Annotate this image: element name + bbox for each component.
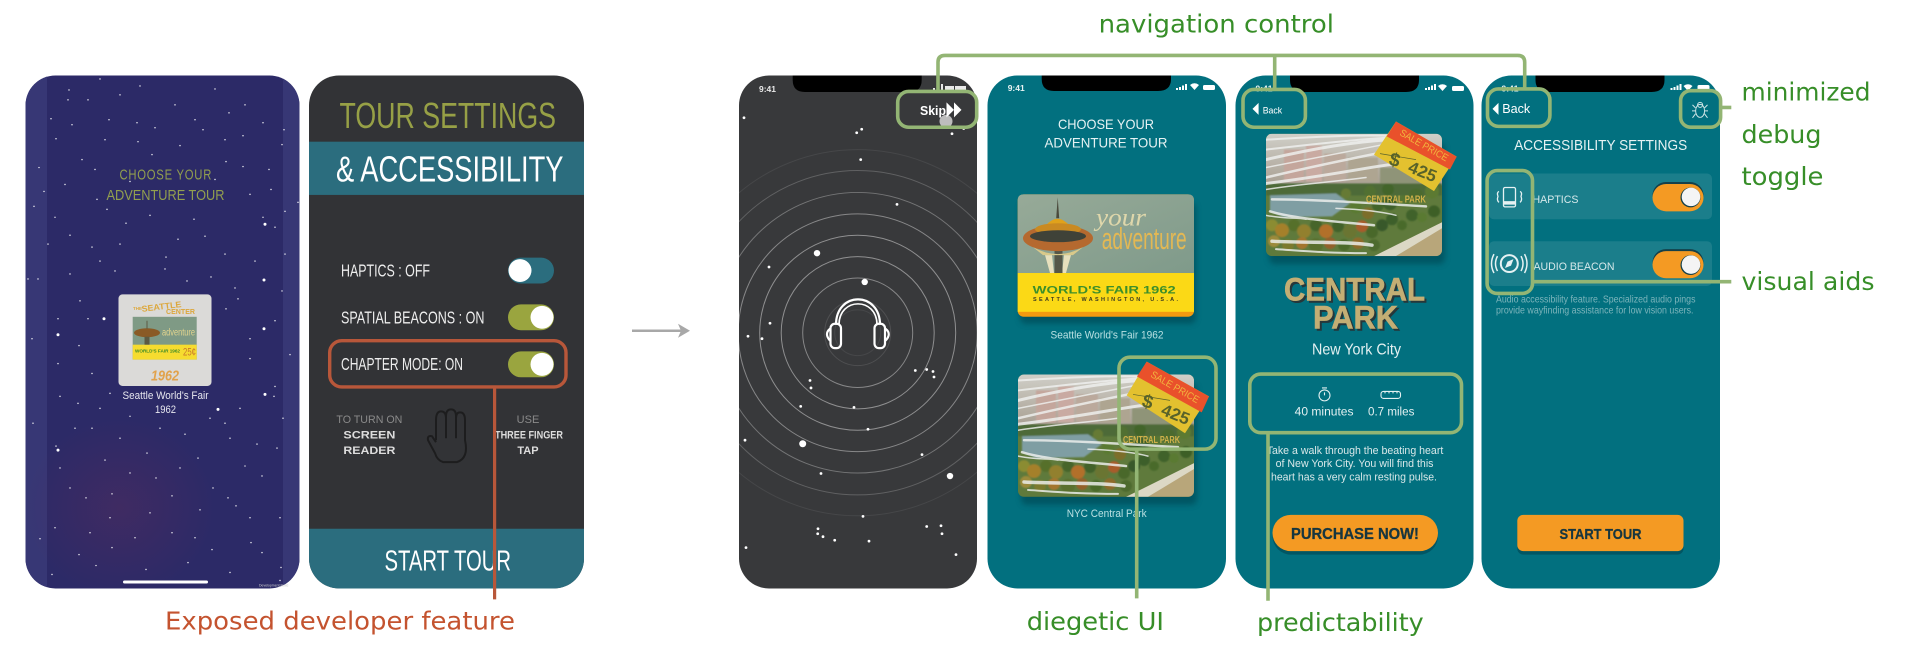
notch [1042, 76, 1171, 91]
slide card: Seattle Center 1962: 25¢ [183, 347, 196, 359]
slide card: Seattle Center 1962: THE [133, 306, 142, 311]
icon: phone haptics [1497, 187, 1522, 207]
setting: haptics off [341, 258, 554, 283]
card: NYC Central Park [1018, 362, 1209, 505]
caption: Seattle World's Fair 1962 [122, 390, 209, 416]
title: accessibility: & ACCESSIBILITY [336, 149, 564, 189]
sale tag [1127, 362, 1209, 433]
status bar [1008, 83, 1215, 93]
icon: debug bug [1692, 102, 1708, 118]
space needle illustration [1023, 197, 1093, 273]
row: haptics [1489, 174, 1712, 219]
home indicator [123, 580, 208, 583]
screen reader hint: USE [517, 414, 539, 426]
title: tour settings: TOUR SETTINGS [339, 95, 556, 136]
arrow: redesign transition [632, 324, 690, 338]
callout: exposed developer feature: Exposed developer feature [165, 607, 515, 636]
card: World's Fair 1962: WORLD'S FAIR 1962 [1033, 284, 1176, 296]
card: Central Park with sale tag: CENTRAL PARK [1366, 194, 1427, 205]
card: World's Fair 1962: adventure [1102, 221, 1187, 256]
notch [793, 76, 922, 92]
annotation: visual aids: visual aids [1741, 267, 1874, 296]
sale tag: SALE PRICE [1148, 370, 1201, 406]
annotation: diegetic UI: diegetic UI [1027, 607, 1164, 636]
sale tag: $ [1140, 391, 1156, 414]
screen reader hint: SCREEN [343, 430, 395, 442]
caption: Seattle World's Fair 1962: Seattle World's Fair 1962 [1050, 330, 1164, 342]
card: Central Park with sale tag [1266, 121, 1457, 264]
row: haptics: HAPTICS [1532, 194, 1579, 206]
screen reader hint: THREE FINGER [495, 430, 563, 442]
slide card: Seattle Center 1962: adventure [162, 328, 195, 339]
title: Central Park: CENTRAL [1286, 272, 1427, 309]
status time: 9:41 [1256, 83, 1273, 93]
heading: ADVENTURE TOUR [1044, 135, 1167, 151]
status bar: 9:41 [1008, 83, 1025, 93]
card: NYC Central Park: CENTRAL PARK [1123, 435, 1181, 446]
status icons [933, 84, 966, 90]
setting: chapter mode on: CHAPTER MODE: ON [341, 354, 463, 374]
annotation: predictability: predictability [1257, 608, 1424, 637]
accessibility note: provide wayfinding assistance for low vision users. [1496, 306, 1693, 317]
touch dot [940, 114, 952, 126]
screen reader hint: TAP [517, 445, 539, 457]
title: Central Park: CENTRAL [1284, 270, 1425, 307]
row: audio beacon [1489, 241, 1712, 286]
card: World's Fair 1962: your [1093, 204, 1146, 231]
slide card: Seattle Center 1962: WORLD'S FAIR 1962 [135, 349, 181, 354]
screen reader hint: TO TURN ON [336, 414, 402, 426]
annotation: minimized debug toggle: toggle [1741, 162, 1823, 191]
status time: 9:41 [1501, 83, 1519, 93]
skip control: Skip [920, 103, 946, 118]
stat: duration and distance: 40 minutes [1295, 404, 1354, 418]
description paragraph: heart has a very calm resting pulse. [1271, 472, 1437, 484]
button: purchase now: PURCHASE NOW! [1291, 526, 1419, 543]
button: start tour [1517, 515, 1684, 555]
card: World's Fair 1962 [1018, 194, 1196, 324]
title: Central Park: PARK [1315, 301, 1400, 338]
phone: choose your adventure tour [988, 76, 1226, 588]
annotation: predictability [1250, 374, 1462, 637]
heading: choose your adventure tour: ADVENTURE TOUR [106, 187, 225, 204]
sale tag: 425 [1158, 400, 1193, 429]
status time: 9:41 [759, 84, 776, 94]
phone: audio intro with rings [739, 76, 977, 588]
caption: Seattle World's Fair 1962: Seattle World's Fair [122, 390, 209, 402]
back control: Back [1502, 101, 1531, 116]
annotation: minimized debug toggle: minimized [1741, 77, 1870, 106]
annotation: navigation control [898, 10, 1550, 127]
slide card: Seattle Center 1962: CENTER [166, 309, 195, 316]
annotation: diegetic UI [1027, 357, 1216, 636]
notch [1290, 76, 1419, 92]
notch [1536, 76, 1664, 92]
subtitle: New York City: New York City [1312, 342, 1401, 359]
accessibility note: Audio accessibility feature. Specialized audio pings [1496, 295, 1696, 306]
annotation: navigation control: navigation control [1099, 10, 1334, 39]
card: Central Park with sale tag: SALE PRICE [1397, 128, 1450, 164]
button: start tour: START TOUR [1560, 527, 1642, 543]
row: audio beacon: AUDIO BEACON [1534, 261, 1614, 273]
annotation: minimized debug toggle: debug [1741, 120, 1821, 149]
caption: NYC Central Park: NYC Central Park [1067, 508, 1147, 520]
card: Central Park with sale tag: $ [1387, 149, 1403, 172]
sonar rings [739, 149, 977, 516]
heading: choose your adventure tour: CHOOSE YOUR [119, 167, 212, 183]
heading: choose your adventure tour [106, 167, 225, 204]
annotation: visual aids [1487, 171, 1874, 296]
status icons [1425, 84, 1464, 91]
phone: Central Park detail [1236, 76, 1474, 588]
screen reader hint [336, 414, 563, 457]
description paragraph [1267, 445, 1444, 484]
button: purchase now [1272, 515, 1438, 555]
stat: duration and distance: 0.7 miles [1368, 404, 1414, 418]
phone: starfield tour chooser [25, 75, 301, 597]
setting: spatial beacons on: SPATIAL BEACONS : ON [341, 307, 484, 327]
slide card: Seattle Center 1962 [118, 294, 212, 386]
description paragraph: of New York City. You will find this [1276, 458, 1434, 470]
phone: accessibility settings [1482, 76, 1720, 588]
setting: haptics off: HAPTICS : OFF [341, 261, 430, 281]
setting: chapter mode on [341, 351, 554, 377]
slide card: Seattle Center 1962: SEATTLE [141, 299, 182, 314]
screen reader hint: READER [343, 445, 395, 457]
back control [1252, 103, 1282, 116]
skip control [920, 102, 962, 118]
title: Central Park [1284, 270, 1427, 338]
status icons [1670, 84, 1710, 91]
caption: Seattle World's Fair 1962: 1962 [155, 404, 176, 416]
card: Central Park with sale tag: 425 [1405, 158, 1440, 186]
heading [1044, 116, 1168, 151]
back control: Back [1263, 105, 1282, 116]
annotation: minimized debug toggle [1681, 77, 1870, 191]
development build tag: Development Build [259, 583, 288, 587]
heading: accessibility settings: ACCESSIBILITY SETTINGS [1514, 137, 1687, 154]
card: World's Fair 1962: SEATTLE, WASHINGTON, U.S.A. [1033, 297, 1178, 303]
description paragraph: Take a walk through the beating heart [1267, 445, 1444, 457]
start tour label: START TOUR [384, 546, 511, 578]
icon: three finger hand [428, 409, 466, 462]
stat: duration and distance [1295, 388, 1414, 418]
callout: exposed developer feature [165, 341, 566, 636]
icon: compass beacon [1492, 254, 1527, 273]
title: Central Park: PARK [1313, 299, 1398, 336]
stars [744, 118, 964, 555]
accessibility note [1496, 295, 1696, 317]
icon: headphones [827, 299, 889, 348]
heading: CHOOSE YOUR [1058, 116, 1154, 132]
phone: tour settings and accessibility [309, 76, 584, 589]
slide card: Seattle Center 1962: 1962 [151, 368, 180, 384]
